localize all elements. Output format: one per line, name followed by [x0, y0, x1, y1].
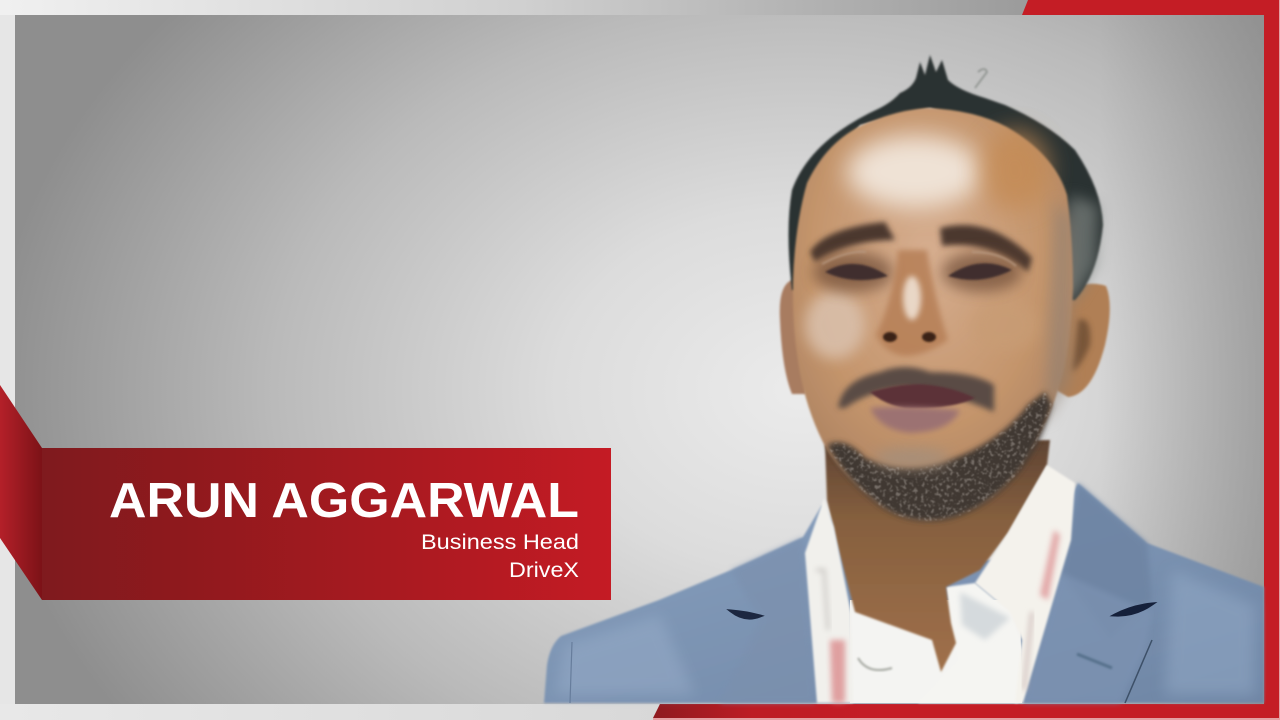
cheek highlights	[805, 291, 865, 359]
lips	[870, 384, 975, 408]
nose	[876, 250, 948, 356]
company: DriveX	[509, 559, 579, 582]
forehead highlight	[847, 136, 983, 208]
hair	[788, 55, 1103, 300]
banner body	[42, 448, 611, 600]
right temple tone	[981, 130, 1049, 210]
banner fold	[0, 385, 42, 600]
ears	[780, 280, 1110, 397]
shirt collar line	[858, 658, 892, 670]
lanyard	[805, 465, 1075, 703]
lapel buttonholes	[731, 604, 1152, 668]
name: ARUN AGGARWAL	[109, 474, 579, 528]
neck	[825, 440, 1050, 672]
role: Business Head	[421, 531, 579, 554]
beard grey speckle	[827, 392, 1052, 521]
eyes	[825, 264, 888, 280]
beard	[827, 392, 1052, 521]
jacket	[544, 483, 1264, 703]
mustache	[838, 367, 994, 412]
shirt	[850, 583, 1022, 703]
eye shadows	[813, 252, 893, 292]
portrait photo of the speaker	[544, 55, 1264, 703]
greying sideburn	[1045, 200, 1072, 425]
brows	[810, 222, 895, 262]
face	[793, 108, 1073, 521]
name banner	[0, 385, 611, 600]
